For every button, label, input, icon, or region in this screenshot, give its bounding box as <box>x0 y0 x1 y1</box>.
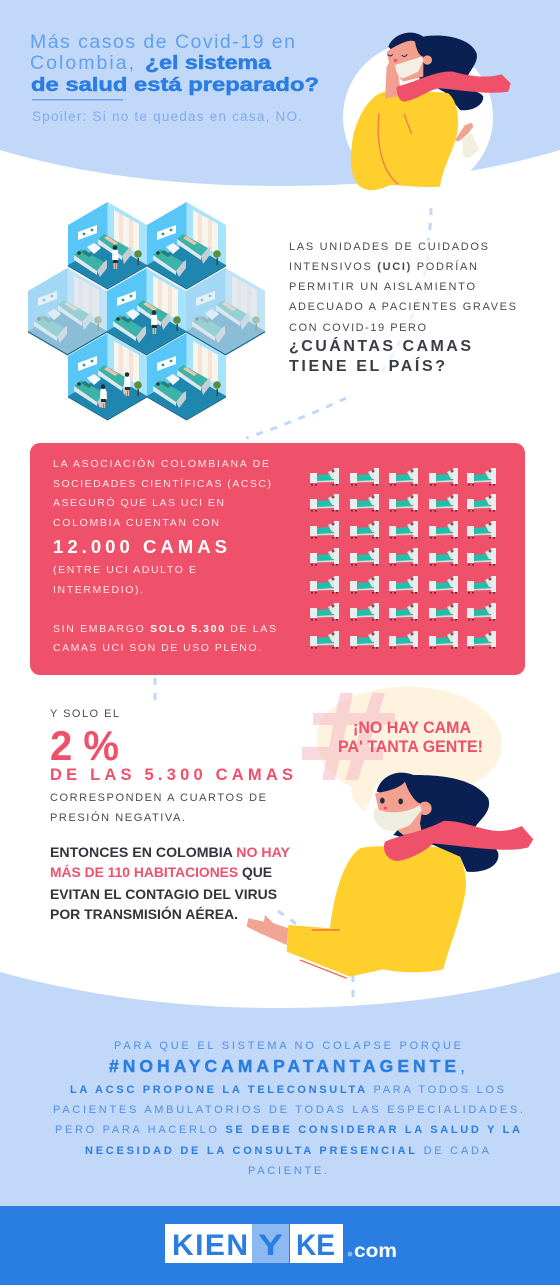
illustration: hospital rooms hex grid <box>28 202 265 420</box>
title: de salud está preparado? <box>31 74 319 96</box>
hair <box>377 773 498 872</box>
text block: 110 rooms conclusion: POR TRANSMISIÓN AÉREA. <box>50 905 238 922</box>
panel text: 12.000 CAMAS <box>53 536 227 557</box>
scarf <box>384 821 533 861</box>
panel text: SOCIEDADES CIENTÍFICAS (ACSC) <box>53 477 271 490</box>
hashtag: #NOHAYCAMAPATANTAGENTE, <box>109 1056 465 1076</box>
panel text: SIN EMBARGO SOLO 5.300 DE LAS <box>53 623 276 635</box>
head with hair, mask and scarf <box>374 773 533 872</box>
text block: 2 percent statistic <box>50 708 293 824</box>
body and arm <box>247 846 466 978</box>
text block: UCI intro: CON COVID-19 PERO <box>289 322 426 334</box>
panel: red beds panel <box>30 443 525 675</box>
panel text: ASEGURÓ QUE LAS UCI EN <box>53 496 224 509</box>
title <box>30 31 319 96</box>
face <box>374 782 432 835</box>
logo <box>165 1224 397 1263</box>
text block: 110 rooms conclusion: EVITAN EL CONTAGIO DEL VIRUS <box>50 886 277 902</box>
panel text: COLOMBIA CUENTAN CON <box>53 517 219 529</box>
text block: 110 rooms conclusion: MÁS DE 110 HABITACIONES QUE <box>50 864 272 880</box>
logo: KIEN <box>172 1229 248 1262</box>
logo: Y <box>258 1229 283 1262</box>
text block: UCI intro: LAS UNIDADES DE CUIDADOS <box>289 241 488 253</box>
header title block <box>30 31 319 124</box>
heading: how many beds: ¿CUÁNTAS CAMAS <box>289 336 471 355</box>
panel text: (ENTRE UCI ADULTO E <box>53 564 196 576</box>
text block: teleconsulta proposal: LA ACSC PROPONE LA TELECONSULTA PARA TODOS LOS <box>70 1084 504 1096</box>
big number: 2 % <box>50 722 119 769</box>
header background <box>0 0 560 186</box>
text block: 110 rooms conclusion <box>50 844 291 922</box>
stat label: DE LAS 5.300 CAMAS <box>50 766 293 784</box>
title: ¿el sistema <box>145 52 271 74</box>
footer light blue section background <box>0 972 560 1207</box>
face and mask <box>387 41 432 82</box>
text block: UCI intro: ADECUADO A PACIENTES GRAVES <box>289 301 516 313</box>
logo: KE <box>296 1229 335 1262</box>
heading: how many beds: TIENE EL PAÍS? <box>289 356 445 375</box>
text block: 110 rooms conclusion: ENTONCES EN COLOMBIA NO HAY <box>50 844 291 860</box>
icon: hashtag <box>302 693 395 780</box>
text block: teleconsulta proposal: PACIENTE. <box>248 1165 327 1177</box>
speech text: PA' TANTA GENTE! <box>338 738 483 756</box>
title: Colombia, <box>30 52 134 74</box>
subtitle spoiler: Spoiler: Si no te quedas en casa, NO. <box>32 109 302 124</box>
scarf <box>397 72 511 102</box>
panel text <box>53 457 276 654</box>
text block: UCI intro: PERMITIR UN AISLAMIENTO <box>289 281 475 293</box>
logo: com <box>354 1241 397 1262</box>
footer band with logo <box>0 1206 560 1285</box>
illustration: woman with mask and scarf <box>247 773 533 978</box>
text block: 2 percent statistic: PRESIÓN NEGATIVA. <box>50 811 185 824</box>
text block: teleconsulta proposal: PARA QUE EL SISTEMA NO COLAPSE PORQUE <box>114 1040 461 1052</box>
hair <box>388 33 483 110</box>
text block: 2 percent statistic: CORRESPONDEN A CUARTOS DE <box>50 792 266 804</box>
heading: how many beds <box>289 336 471 375</box>
dashed path connector <box>155 208 431 1004</box>
text block: teleconsulta proposal: NECESIDAD DE LA CONSULTA PRESENCIAL DE CADA <box>85 1145 490 1157</box>
text block: teleconsulta proposal <box>53 1040 523 1177</box>
raised hand <box>385 62 400 98</box>
text block: UCI intro: INTENSIVOS (UCI) PODRÍAN <box>289 260 477 273</box>
panel text: INTERMEDIO). <box>53 584 143 596</box>
text block: 2 percent statistic: Y SOLO EL <box>50 708 119 720</box>
icon grid: beds <box>310 468 496 649</box>
panel text: LA ASOCIACIÓN COLOMBIANA DE <box>53 457 269 470</box>
speech text <box>338 719 483 756</box>
title: Más casos de Covid-19 en <box>30 31 295 53</box>
speech bubble with hashtag <box>302 687 502 812</box>
illustration: woman sneezing with scarf <box>343 33 560 192</box>
panel text: CAMAS UCI SON DE USO PLENO. <box>53 642 261 654</box>
text block: teleconsulta proposal: PACIENTES AMBULATORIOS DE TODAS LAS ESPECIALIDADES. <box>53 1104 523 1116</box>
text block: teleconsulta proposal: PERO PARA HACERLO SE DEBE CONSIDERAR LA SALUD Y LA <box>55 1124 520 1136</box>
speech text: ¡NO HAY CAMA <box>353 719 471 737</box>
text block: UCI intro <box>289 241 516 375</box>
hand with tissue <box>455 123 479 158</box>
body <box>351 92 458 190</box>
